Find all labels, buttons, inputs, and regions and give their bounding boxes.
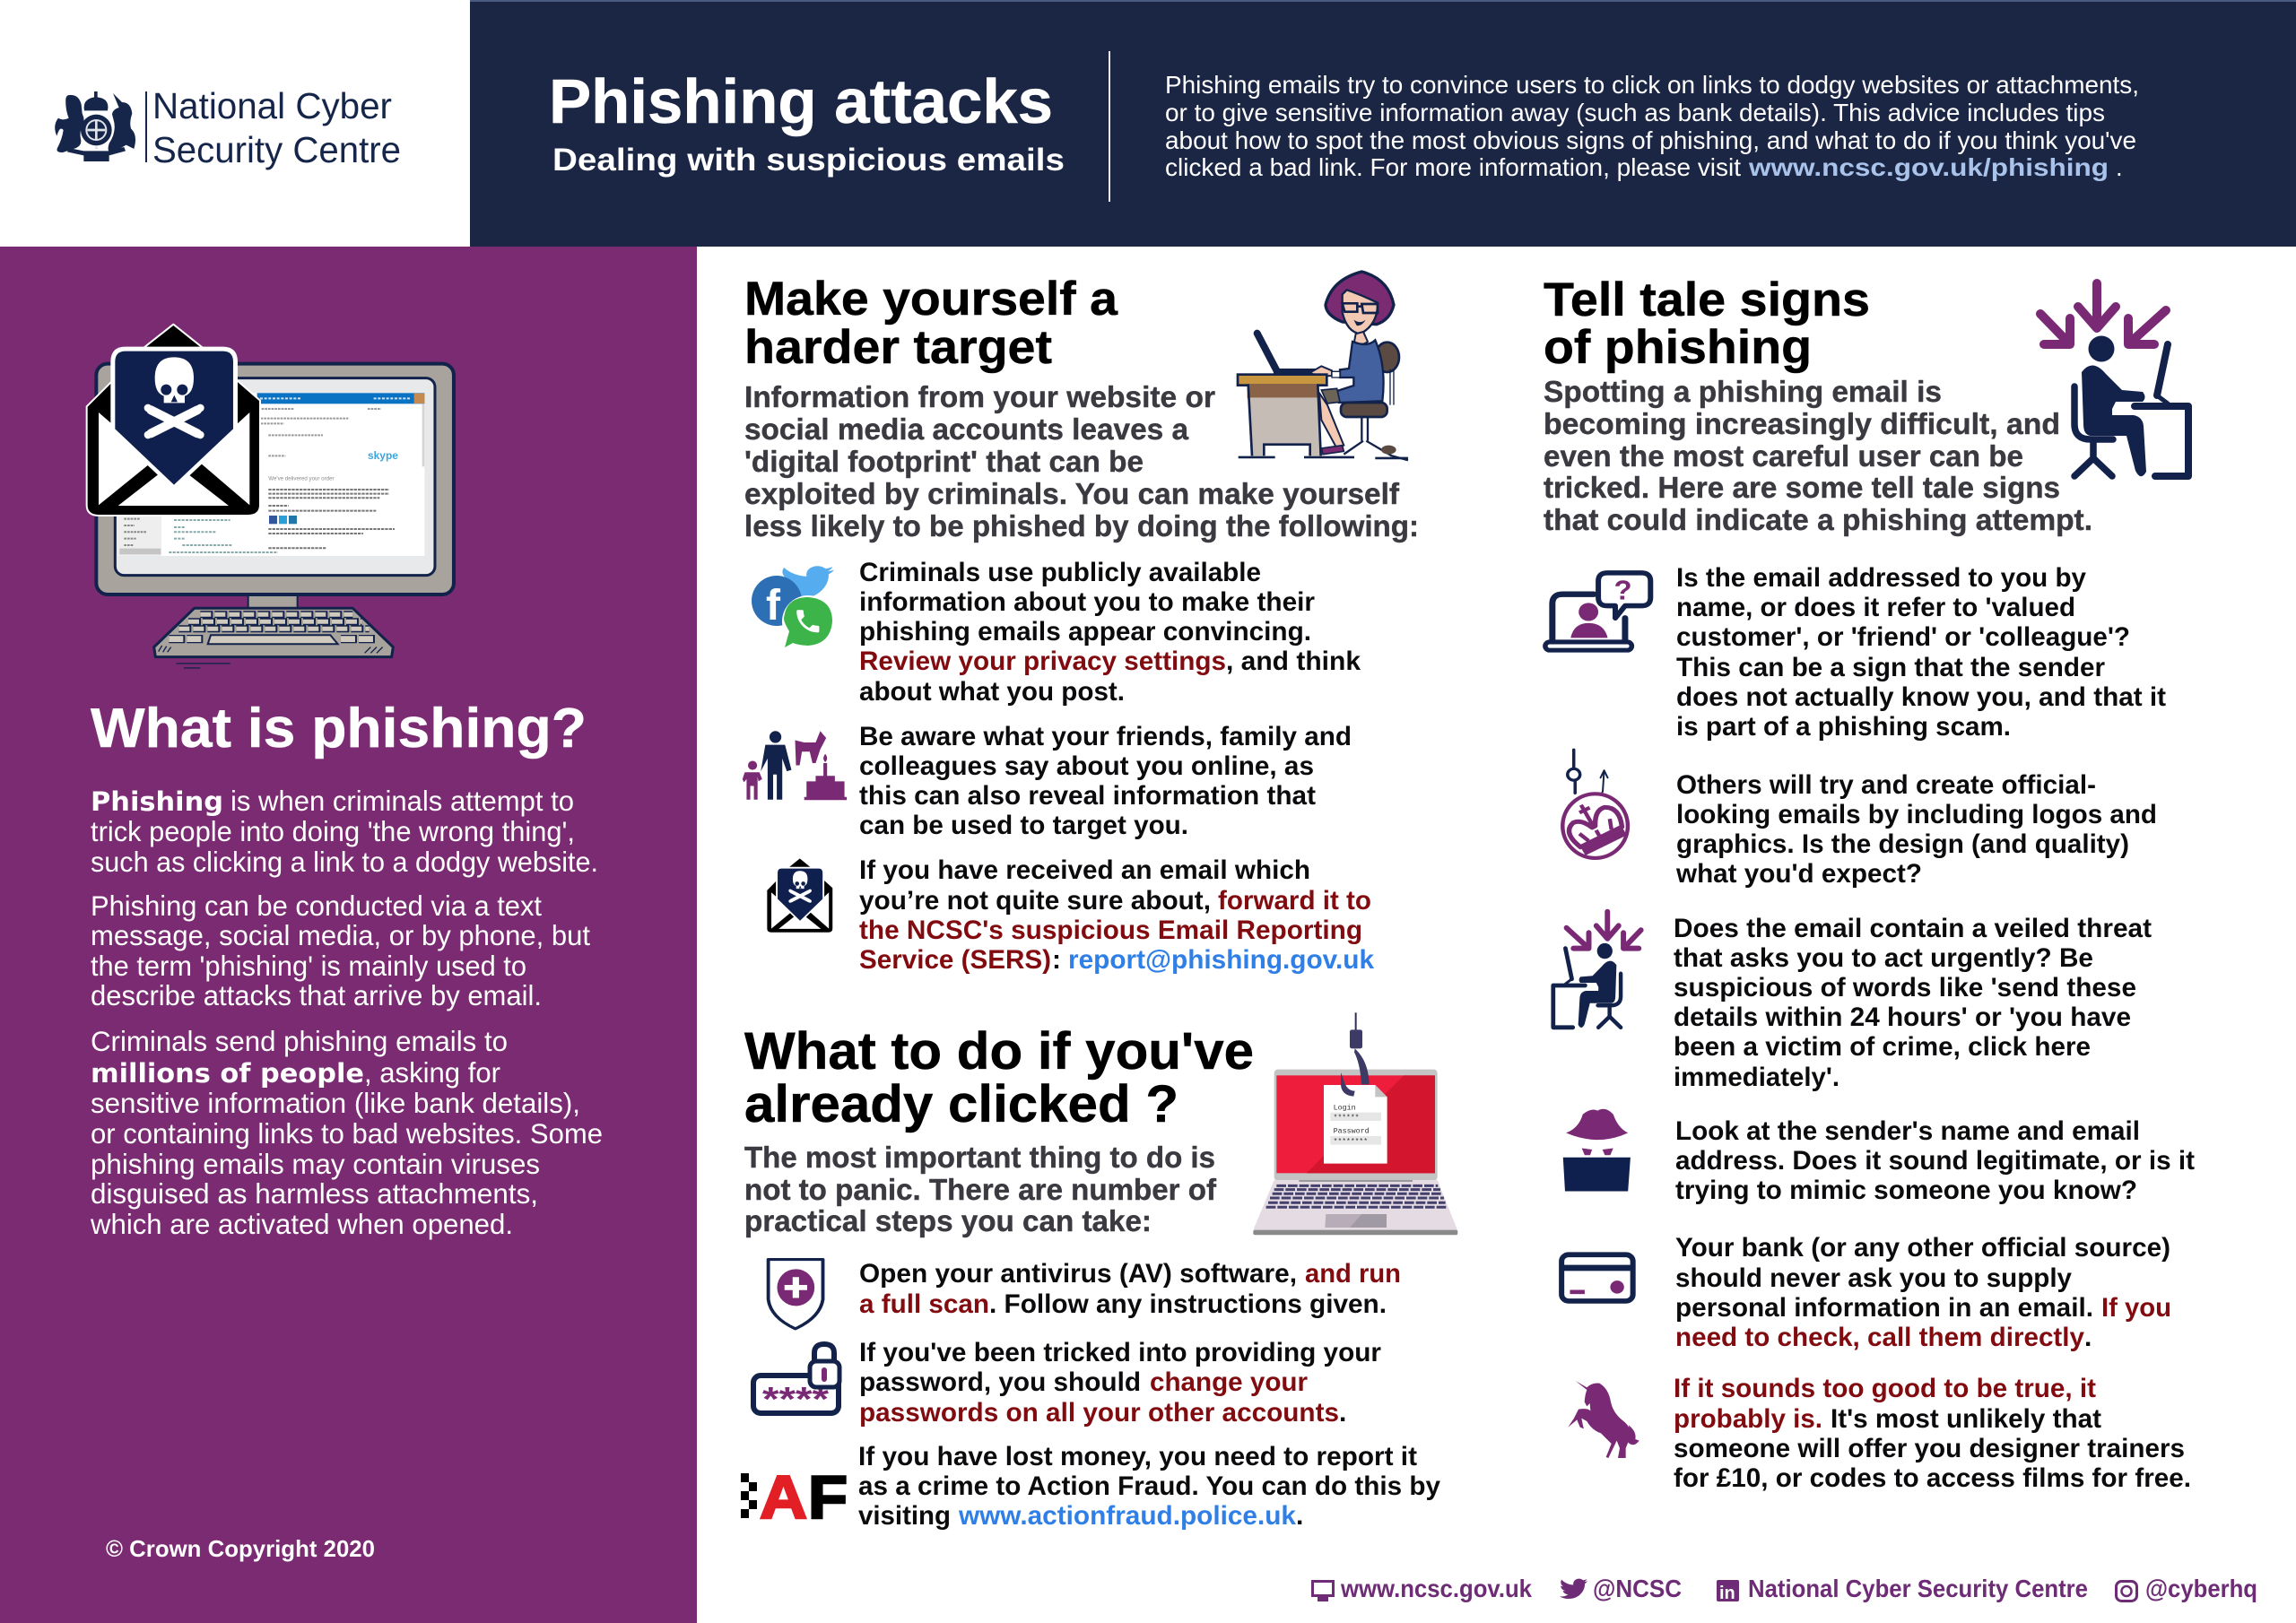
paragraph: criminals: disguised as harmless attachments, [91,1177,538,1210]
tip: report suspicious emails: forward it to [1218,886,1371,916]
header intro text: www.ncsc.gov.uk/phishing [1748,153,2109,181]
icon: hook and crown logo [1559,750,1630,858]
tip: report suspicious emails: you’re not quite sure about, [859,886,1211,916]
icon: bank card [1561,1254,1633,1301]
panel: what is phishing [0,247,697,1623]
heading: What to do if you've [744,1022,1254,1081]
tip: logos and graphics: what you'd expect? [1675,859,1922,889]
paragraph: definition: Phishing [91,786,223,817]
icon: social media logos: f [766,582,781,629]
tip: friends and family: colleagues say about you online, as [859,751,1314,781]
tip: privacy settings: phishing emails appear convincing. [859,617,1311,647]
heading [744,273,1118,374]
tip: privacy settings: Review your privacy settings [859,647,1226,676]
tip: too good to be true: It's most unlikely that [1831,1404,2101,1434]
icon: family, dog and cake [743,731,847,800]
header intro text: clicked a bad link. For more information, please visit [1165,153,1741,181]
icon: instagram [2117,1582,2136,1601]
tip: report to Action Fraud: www.actionfraud.police.uk [958,1501,1296,1531]
panel: what to do if you've already clicked [741,1012,1457,1532]
icon: person under pressure small [1553,912,1641,1028]
intro text: Spotting a phishing email is [1544,376,1942,409]
tip: bank details: need to check, call them directly [1675,1323,2084,1352]
tip: change passwords: change your [1150,1367,1308,1397]
linkedin name: National Cyber Security Centre [1748,1575,2088,1602]
heading: Tell tale signs [1544,273,1870,326]
icon: password lock: **** [762,1381,829,1419]
instagram handle: @cyberhq [2145,1575,2257,1602]
tip: bank details: . [2084,1323,2092,1352]
tip: run antivirus: and run [1305,1259,1401,1289]
header intro text: about how to spot the most obvious signs of phishing, and what to do if you think you've [1165,126,2136,154]
intro text: becoming increasingly difficult, and [1544,408,2060,441]
tip: report suspicious emails: : [1052,945,1061,975]
tip: privacy settings: Criminals use publicly available [859,558,1261,587]
paragraph: channels: message, social media, or by phone, but [91,919,590,951]
tip: veiled threat: been a victim of crime, click here [1674,1032,2091,1062]
panel: make yourself a harder target [743,272,1419,975]
intro text: 'digital footprint' that can be [744,446,1144,479]
tip: sender name: address. Does it sound legitimate, or is it [1675,1146,2195,1176]
twitter handle: @NCSC [1593,1575,1682,1602]
paragraph: channels [91,890,590,1011]
website link: www.ncsc.gov.uk [1340,1575,1533,1602]
tip: too good to be true: someone will offer you designer trainers [1674,1434,2185,1463]
header intro text: . [2116,153,2123,181]
tip: report suspicious emails: If you have received an email which [859,855,1310,885]
intro text: practical steps you can take: [744,1205,1152,1238]
paragraph: criminals: millions of people [91,1058,364,1089]
icon: monitor [1313,1582,1333,1601]
copyright: © Crown Copyright 2020 [106,1535,375,1562]
intro text: that could indicate a phishing attempt. [1544,504,2092,537]
tip: logos and graphics [1675,770,2157,889]
paragraph: criminals: , asking for [364,1056,500,1089]
panel: tell tale signs of phishing [1544,273,2195,1493]
logo wordmark: Security Centre [152,129,401,170]
paragraph: definition [91,785,598,878]
intro text: not to panic. There are number of [744,1174,1217,1207]
icon: laptop user with question: ? [1614,575,1632,605]
icon: linkedin: in [1719,1584,1735,1603]
paragraph: channels: describe attacks that arrive by email. [91,979,542,1011]
footer: contact links [1313,1575,2257,1603]
tip: report suspicious emails: report@phishing.gov.uk [1068,945,1374,975]
illustration: laptop with hooked login page [1253,1012,1457,1235]
illustration: laptop with hooked login page: Login [1334,1103,1356,1112]
paragraph: definition: trick people into doing 'the wrong thing', [91,815,575,847]
tip: report suspicious emails [859,855,1374,975]
tip: veiled threat: immediately'. [1674,1063,1839,1092]
logo wordmark [145,85,401,170]
tip: veiled threat: suspicious of words like 'send these [1674,973,2136,1002]
tip: sender name: Look at the sender's name and email [1675,1116,2140,1146]
tip: change passwords [859,1338,1381,1428]
tip: friends and family: this can also reveal information that [859,781,1316,811]
tip: bank details: personal information in an email. [1675,1293,2093,1323]
tip: logos and graphics: graphics. Is the design (and quality) [1676,829,2129,859]
tip: friends and family: can be used to target you. [859,811,1188,840]
tip: addressed by name: Is the email addressed to you by [1676,563,2086,593]
logo wordmark: National Cyber [152,85,392,126]
header intro text: or to give sensitive information away (such as bank details). This advice includes tips [1165,99,2105,126]
intro text: even the most careful user can be [1544,440,2023,473]
icon: antivirus shield [769,1260,823,1329]
icon: Action Fraud logo: A [760,1463,807,1532]
illustration: computer with phishing email: We've delivered your order [268,475,335,482]
tip: veiled threat: that asks you to act urgently? Be [1674,943,2093,973]
tip: privacy settings: information about you to make their [859,587,1315,617]
icon: person under pressure [2040,283,2188,476]
paragraph: criminals: phishing emails may contain viruses [91,1148,540,1180]
icon: twitter [1560,1579,1587,1599]
illustration: computer with phishing email [87,325,454,668]
tip: veiled threat: details within 24 hours' or 'you have [1674,1002,2131,1032]
icon: phishing email [767,858,833,933]
tip: report to Action Fraud: If you have lost money, you need to report it [858,1442,1417,1471]
subtitle: Dealing with suspicious emails [552,143,1065,178]
heading [744,1022,1254,1133]
heading: of phishing [1544,321,1812,374]
heading: Make yourself a [744,273,1118,325]
paragraph: criminals: which are activated when opened. [90,1208,513,1240]
tip: run antivirus [859,1259,1401,1319]
tip: addressed by name: name, or does it refer to 'valued [1676,593,2075,622]
tip: run antivirus: a full scan [859,1289,989,1319]
tip: addressed by name [1676,563,2166,742]
tip: veiled threat: Does the email contain a veiled threat [1674,914,2152,943]
tip: friends and family [859,722,1352,840]
intro text [744,1141,1217,1238]
tip: bank details: If you [2101,1293,2171,1323]
tip: privacy settings: about what you post. [859,677,1125,707]
paragraph: criminals: Criminals send phishing emails to [91,1025,508,1057]
intro text [744,381,1419,543]
tip: addressed by name: does not actually know you, and that it [1676,682,2166,712]
tip: change passwords: passwords on all your other accounts [859,1398,1339,1428]
tip: privacy settings [859,558,1361,707]
icon: laptop user with question [1545,573,1650,650]
paragraph: channels: Phishing can be conducted via a text [91,890,542,922]
tip: logos and graphics: looking emails by including logos and [1676,800,2157,829]
icon: unicorn [1568,1381,1639,1458]
tip: too good to be true: for £10, or codes to access films for free. [1674,1463,2191,1493]
heading: What is phishing? [91,698,587,759]
icon: password lock [753,1344,839,1419]
tip: too good to be true: If it sounds too good to be true, it [1674,1374,2096,1403]
tip: friends and family: Be aware what your friends, family and [859,722,1352,751]
intro text: tricked. Here are some tell tale signs [1544,472,2060,505]
title: Phishing attacks [549,66,1053,136]
paragraph: criminals: or containing links to bad websites. Some [91,1117,603,1150]
panel: header logo [55,85,401,170]
intro text [1544,376,2092,537]
tip: too good to be true [1674,1374,2191,1493]
header intro text: Phishing emails try to convince users to click on links to dodgy websites or attachments, [1165,71,2139,99]
icon: Action Fraud logo: F [808,1463,848,1532]
tip: addressed by name: customer', or 'friend' or 'colleague'? [1676,622,2130,652]
illustration: computer with phishing email: skype [368,449,398,462]
paragraph: channels: the term 'phishing' is mainly used to [91,950,526,982]
tip: addressed by name: is part of a phishing scam. [1676,712,2011,742]
tip: run antivirus: Open your antivirus (AV) software, [859,1259,1297,1289]
tip: sender name [1675,1116,2195,1205]
paragraph: definition: is when criminals attempt to [230,785,574,817]
tip: too good to be true: probably is. [1674,1404,1822,1434]
tip: change passwords: password, you should [859,1367,1141,1397]
heading [1544,273,1870,374]
tip: change passwords: If you've been tricked into providing your [859,1338,1381,1367]
intro text: exploited by criminals. You can make yourself [744,478,1400,511]
icon: royal coat of arms [55,91,135,161]
tip: run antivirus: . Follow any instructions given. [989,1289,1387,1319]
tip: bank details [1675,1233,2171,1352]
tip: veiled threat [1674,914,2152,1092]
tip: bank details: should never ask you to supply [1675,1263,2072,1293]
illustration: laptop with hooked login page: ******** [1334,1138,1368,1146]
tip: privacy settings: , and think [1226,647,1361,676]
paragraph: definition: such as clicking a link to a dodgy website. [91,846,598,878]
tip: change passwords: . [1339,1398,1346,1428]
tip: report suspicious emails: the NCSC's suspicious Email Reporting [859,916,1362,945]
icon: linkedin [1717,1580,1739,1603]
tip: report to Action Fraud [858,1442,1440,1531]
illustration: laptop with hooked login page: ****** [1334,1114,1359,1122]
paragraph: criminals: sensitive information (like bank details), [91,1087,580,1119]
icon: hooded spy [1563,1109,1631,1191]
tip: report to Action Fraud: . [1296,1501,1303,1531]
tip: report suspicious emails: Service (SERS) [859,945,1051,975]
intro text: less likely to be phished by doing the following: [744,510,1419,543]
tip: addressed by name: This can be a sign that the sender [1676,653,2105,682]
intro text: social media accounts leaves a [744,413,1188,447]
paragraph: criminals [90,1025,603,1240]
heading: harder target [744,321,1052,374]
heading: already clicked ? [744,1075,1178,1133]
intro text: The most important thing to do is [744,1141,1215,1175]
tip: report to Action Fraud: visiting [858,1501,951,1531]
tip: report to Action Fraud: as a crime to Action Fraud. You can do this by [858,1471,1440,1501]
tip: bank details: Your bank (or any other official source) [1675,1233,2170,1263]
tip: logos and graphics: Others will try and create official- [1676,770,2096,800]
illustration: laptop with hooked login page: Password [1334,1126,1370,1135]
icon: social media logos [752,566,834,647]
panel: header band [470,0,2296,247]
tip: sender name: trying to mimic someone you know? [1675,1176,2137,1205]
icon: Action Fraud logo [741,1463,848,1532]
header intro text [1165,71,2139,181]
intro text: Information from your website or [744,381,1215,414]
illustration: woman at desk [1238,272,1408,460]
